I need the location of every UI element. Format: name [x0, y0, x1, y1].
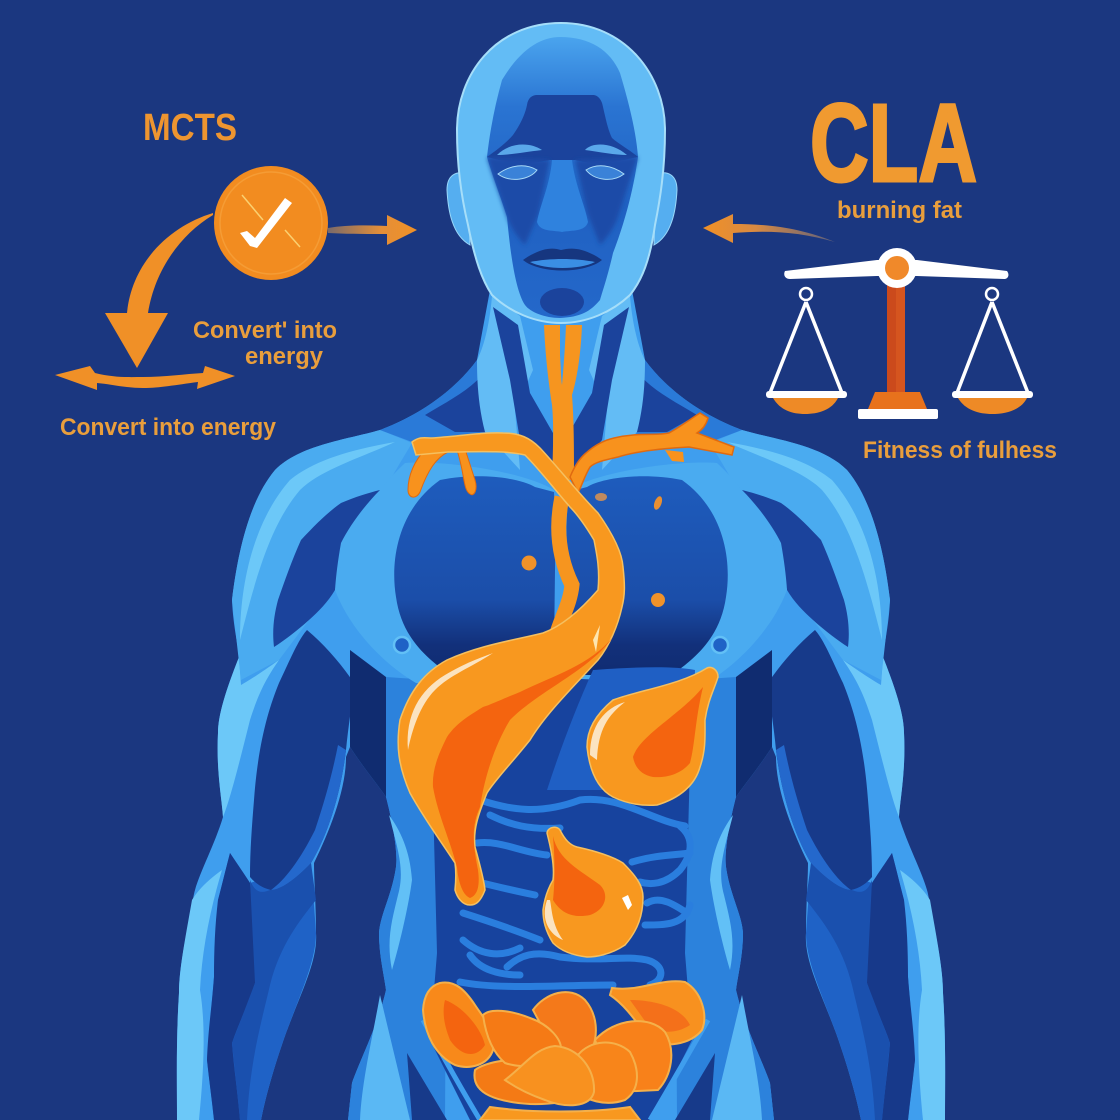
heading: CLA: CLA [810, 82, 977, 205]
lower abdomen V line [423, 1020, 480, 1120]
eye and cheek shadows right [575, 157, 638, 245]
esophagus [544, 325, 582, 480]
icon: balance scale [766, 248, 1033, 419]
double arrow [55, 366, 235, 390]
right eyebrow [585, 145, 627, 155]
arrow to body [703, 214, 835, 243]
droplet F [575, 1043, 637, 1103]
droplet cluster [423, 981, 704, 1120]
forehead shadow [487, 95, 638, 165]
label: fitness of fullness: Fitness of fulhess [863, 437, 1057, 464]
sternum line [554, 490, 568, 650]
droplet dot small [595, 493, 607, 501]
figure: human body [177, 23, 945, 1120]
head [457, 23, 665, 323]
upper abdomen mid-blue panel [547, 667, 695, 790]
droplet A [423, 982, 493, 1067]
body left half [177, 290, 562, 1120]
nose [537, 160, 588, 232]
abdomen muscle and intestine contours [460, 799, 690, 987]
left tail [408, 450, 448, 497]
label: convert into energy lower: Convert into energy [60, 414, 277, 441]
panel: MCTs [55, 107, 417, 441]
stomach dark core [433, 637, 613, 898]
right ear [654, 173, 677, 245]
left eyebrow [497, 145, 542, 155]
arrow down [105, 213, 213, 368]
droplet G [505, 1046, 594, 1105]
droplet C [533, 992, 596, 1060]
stomach small highlight [593, 625, 600, 652]
thin swirl strand [555, 497, 572, 640]
droplet B [483, 1011, 561, 1066]
droplet dot small [652, 495, 664, 511]
right small tail [665, 450, 684, 462]
lower lip highlight [530, 259, 595, 268]
left small tail [457, 450, 476, 495]
droplet H [474, 1059, 584, 1104]
label: energy: energy [245, 343, 324, 370]
face [487, 37, 638, 318]
lips [523, 249, 602, 270]
panel: CLA [703, 82, 1057, 464]
digestive tract [398, 325, 734, 905]
right branch [570, 413, 734, 493]
heading: MCTS: MCTS [143, 107, 237, 149]
icon: check circle [214, 166, 328, 280]
chin [540, 288, 584, 316]
droplet D core [630, 1000, 690, 1032]
label: convert into energy upper: Convert' into [193, 317, 337, 344]
droplet dot [522, 556, 536, 570]
droplet bottom [480, 1107, 640, 1120]
label: burning fat: burning fat [837, 197, 962, 224]
lower abdomen V line right [650, 1020, 708, 1120]
left eye [498, 166, 537, 179]
droplet dot [651, 593, 665, 607]
stomach highlight [408, 653, 493, 750]
droplet D [610, 981, 704, 1044]
left branch and stomach [398, 433, 624, 905]
arrow to body [328, 215, 417, 245]
left ear [447, 173, 470, 245]
droplet middle [543, 827, 643, 957]
droplet A core [444, 1000, 485, 1054]
droplet upper [587, 667, 718, 805]
droplet E [595, 1021, 671, 1092]
fat droplets [423, 667, 718, 1120]
right eye [586, 166, 624, 179]
eye and cheek shadows [487, 157, 550, 245]
body right half [560, 290, 945, 1120]
